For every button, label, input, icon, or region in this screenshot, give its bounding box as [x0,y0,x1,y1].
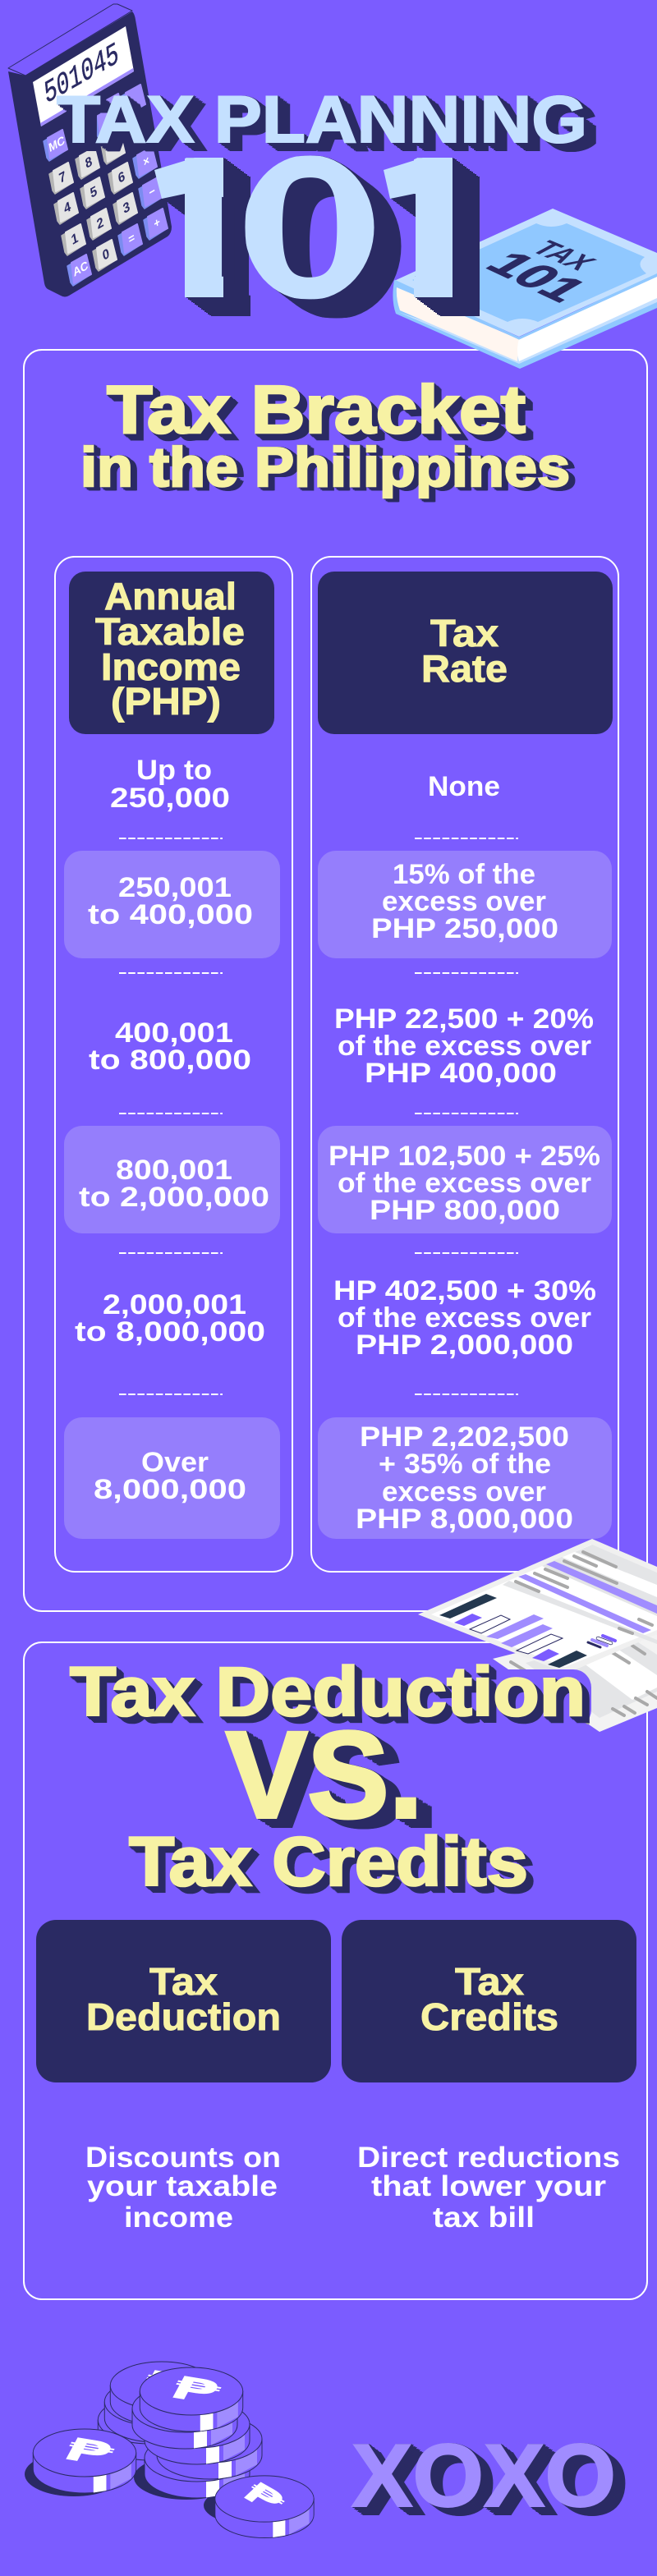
text: tax deduction definition: Discounts on [85,2142,281,2174]
row: over 8,000,000: 8,000,000 [94,1474,246,1505]
calculator keys: 8 [84,154,94,172]
rate: 15 percent: PHP 250,000 [371,913,558,944]
text: tax credits definition: tax bill [433,2202,535,2234]
calculator keys: + [153,215,161,232]
row: 800,001 to 2,000,000: to 2,000,000 [79,1182,269,1213]
rate: 20 percent: PHP 22,500 + 20% [334,1003,594,1035]
rate: 15 percent: excess over [382,886,546,917]
rate: 35 percent: PHP 8,000,000 [356,1504,573,1535]
title: 101 [154,156,480,319]
calculator keys: 5 [89,183,99,201]
card: tax credits: Tax [455,1960,524,2003]
row: 400,001 to 800,000: to 800,000 [89,1045,251,1076]
coin: left [33,2429,136,2493]
title: tax planning: TAX PLANNING [57,83,587,157]
card: tax deduction: Deduction [86,1995,281,2038]
rate: 15 percent: 15% of the [393,859,535,890]
calculator keys: = [127,231,136,247]
header: annual taxable income: Taxable [95,610,245,653]
text halo [485,1669,591,1728]
card: tax credits: Credits [420,1995,558,2038]
row: 800,001 to 2,000,000: 800,001 [116,1155,232,1186]
coin: left: ₱ [57,2431,121,2473]
calculator keys: AC [72,259,90,280]
icon: book [393,209,657,369]
title: 101: 101 [121,114,503,340]
text: tax credits definition [357,2142,620,2234]
header: tax rate: Tax [430,612,498,654]
page block [397,287,519,361]
icon: calculator [8,4,172,297]
rate: 20 percent: PHP 400,000 [365,1058,557,1089]
calculator keys: 7 [57,168,67,186]
coin stack: ₱ [163,2370,227,2412]
rate: 30 percent [333,1275,596,1361]
row: 2,000,001 to 8,000,000: to 8,000,000 [75,1316,265,1348]
panel: tax bracket [24,350,647,1611]
heading: tax deduction: Tax Deduction [70,1653,586,1730]
column: annual taxable income [55,557,292,1572]
card: tax credits [342,1920,636,2082]
cover [394,209,657,337]
row: 250,001 to 400,000: 250,001 [118,872,232,903]
rate: 30 percent: of the excess over [338,1302,591,1334]
panel: tax deduction vs tax credits [24,1539,657,2299]
rate: 30 percent: HP 402,500 + 30% [333,1275,596,1306]
calculator keys: 3 [122,199,131,217]
header: tax rate [318,572,613,734]
header: tax rate: Rate [421,647,508,690]
calculator keys: × [142,154,150,170]
heading: in the philippines: in the Philippines [80,436,570,498]
rate: 35 percent [318,1417,612,1539]
icon: peso coins [25,2362,314,2538]
rate: 25 percent: PHP 102,500 + 25% [328,1141,600,1172]
row: up to 250,000: 250,000 [110,783,230,814]
calculator keys: − [148,184,156,200]
calculator keys: MC [48,134,66,155]
heading: vs: VS. [226,1706,423,1844]
coin: right [215,2476,314,2538]
text: tax credits definition: Direct reductions [357,2142,620,2174]
icon: tax documents [418,1539,657,1732]
rate: 25 percent: of the excess over [338,1168,591,1199]
text: tax deduction definition [85,2142,281,2234]
header: annual taxable income: (PHP) [111,680,221,723]
calculator keys: 6 [117,168,126,186]
card: tax deduction [36,1920,331,2082]
calculator keys: 0 [101,246,111,264]
spine and bottom cover [393,271,657,369]
text: tax deduction definition: your taxable [87,2170,278,2202]
rate: 35 percent: + 35% of the [379,1449,551,1480]
book title: 101: 101 [475,245,600,308]
rate: 35 percent: excess over [382,1476,546,1508]
row: 400,001 to 800,000: 400,001 [115,1017,233,1049]
sign-off: xoxo: XOXO [351,2426,616,2526]
rate: 30 percent: PHP 2,000,000 [356,1329,573,1361]
row: 250,001 to 400,000: to 400,000 [88,899,253,930]
calculator keys: 4 [62,199,72,217]
rate: none: None [428,771,500,802]
row: up to 250,000 [110,755,230,814]
row: 2,000,001 to 8,000,000 [75,1289,265,1348]
row: up to 250,000: Up to [136,755,212,786]
rate: 20 percent [334,1003,594,1089]
column: tax rate [311,557,618,1572]
book title: tax: TAX [523,236,604,274]
header: annual taxable income [69,572,274,734]
row: over 8,000,000: Over [141,1447,209,1478]
row: 250,001 to 400,000 [64,851,280,958]
calculator keys [44,85,168,286]
row: 2,000,001 to 8,000,000: 2,000,001 [103,1289,246,1320]
coin: right: ₱ [234,2476,293,2519]
heading: tax credits: Tax Credits [129,1823,528,1900]
rate: 25 percent: PHP 800,000 [370,1195,560,1226]
row: 400,001 to 800,000 [89,1017,251,1076]
coin shadows [25,2452,302,2525]
calculator display: 501045 [43,37,121,113]
header: annual taxable income: Income [101,645,241,688]
text: tax deduction definition: income [124,2202,233,2234]
calculator keys: 1 [70,230,80,248]
rate: 15 percent [318,851,612,958]
row: over 8,000,000 [64,1417,280,1539]
row: 800,001 to 2,000,000 [64,1126,280,1233]
calculator keys: 2 [95,214,105,232]
coin stack: ₱ [134,2364,198,2406]
coin stack [98,2362,262,2498]
text: tax credits definition: that lower your [371,2170,606,2202]
header: annual taxable income: Annual [104,575,237,618]
card: tax deduction: Tax [149,1960,218,2003]
rate: 20 percent: of the excess over [338,1031,591,1062]
rate: 35 percent: PHP 2,202,500 [360,1421,569,1453]
heading: tax bracket: Tax Bracket [107,371,526,448]
rate: 25 percent [318,1126,612,1233]
